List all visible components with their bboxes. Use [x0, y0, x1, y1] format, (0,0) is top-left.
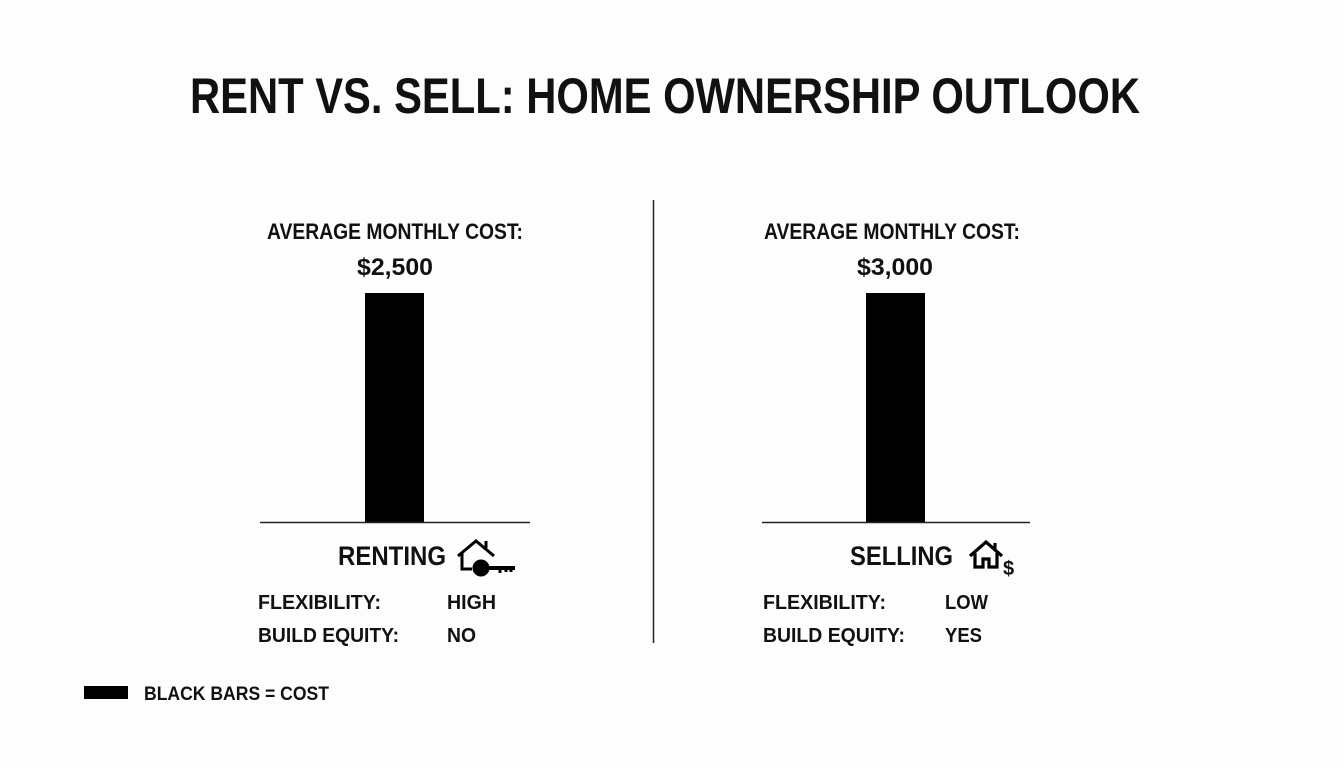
bar: renting	[365, 293, 424, 522]
heading: selling: SELLING	[850, 541, 953, 571]
baseline: renting	[260, 522, 530, 524]
legend: BLACK BARS = COST	[144, 684, 329, 705]
baseline: selling	[762, 522, 1030, 524]
icon: house with dollar: $	[1003, 558, 1014, 580]
stats: selling: BUILD EQUITY:	[763, 625, 905, 647]
stats: selling	[763, 592, 988, 647]
divider	[652, 200, 654, 643]
panel: renting	[258, 219, 530, 647]
stats: renting: BUILD EQUITY:	[258, 625, 399, 647]
stats: renting: FLEXIBILITY:	[258, 592, 381, 614]
cost value: selling: $3,000	[857, 254, 933, 281]
cost label: renting: AVERAGE MONTHLY COST:	[267, 219, 523, 244]
icon: house with key	[458, 541, 515, 575]
stats: selling: FLEXIBILITY:	[763, 592, 886, 614]
bar: selling	[866, 293, 925, 522]
stats: renting: NO	[447, 625, 476, 647]
cost label: selling: AVERAGE MONTHLY COST:	[764, 219, 1020, 244]
stats: renting: HIGH	[447, 592, 496, 614]
stats: renting	[258, 592, 496, 647]
title: RENT VS. SELL: HOME OWNERSHIP OUTLOOK	[190, 68, 1140, 124]
cost value: renting: $2,500	[357, 254, 433, 281]
panel: selling	[762, 219, 1030, 647]
icon: house with dollar	[970, 542, 1014, 580]
stats: selling: YES	[945, 625, 982, 647]
heading: renting: RENTING	[338, 541, 446, 571]
stats: selling: LOW	[945, 592, 988, 614]
